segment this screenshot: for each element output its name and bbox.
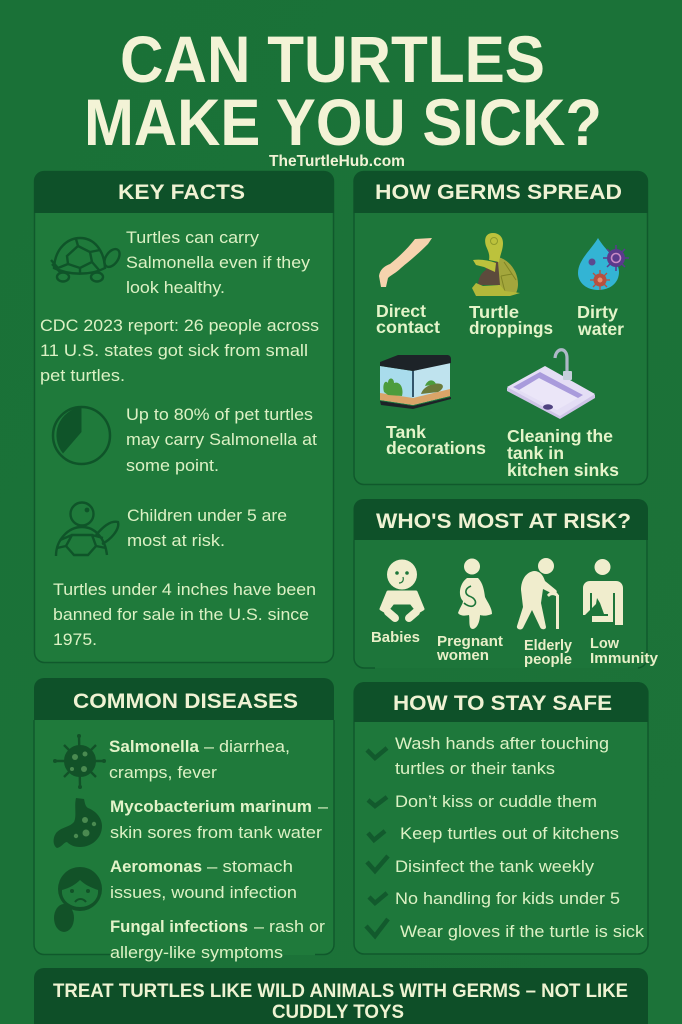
label: pregnant women: women xyxy=(436,648,489,664)
text: sale ban: Turtles under 4 inches have been xyxy=(53,580,316,599)
icon: kitchen sink xyxy=(507,350,595,419)
icon: pie chart xyxy=(53,407,110,464)
label: pregnant women: Pregnant xyxy=(437,634,503,650)
panel: who's most at risk xyxy=(354,499,658,668)
icon: turtle droppings xyxy=(472,233,520,296)
text: mycobacterium: skin sores from tank water xyxy=(110,823,322,842)
text: safety tips: turtles or their tanks xyxy=(395,759,555,778)
label: direct contact: contact xyxy=(376,317,440,337)
icon: stomach xyxy=(54,798,102,848)
label: low immunity: Immunity xyxy=(590,651,658,667)
text: safety tips xyxy=(395,734,645,941)
text: fungal infections: Fungal infections xyxy=(110,917,248,936)
label: tank decorations xyxy=(386,422,486,458)
label: dirty water: Dirty xyxy=(577,302,618,322)
label: tank decorations: decorations xyxy=(386,438,486,458)
label: elderly people: people xyxy=(524,652,572,668)
heading: key facts: KEY FACTS xyxy=(118,180,245,204)
text: salmonella fact: Turtles can carry xyxy=(126,228,260,247)
text: fungal infections: allergy-like symptoms xyxy=(110,943,283,962)
icon: virus xyxy=(53,734,106,789)
icon: low immunity person xyxy=(583,559,623,625)
title: CAN TURTLES xyxy=(120,22,545,96)
label: direct contact xyxy=(376,301,440,337)
text: salmonella: Salmonella xyxy=(109,737,200,756)
text: fungal infections xyxy=(110,917,325,962)
panel: key facts xyxy=(34,171,334,662)
text: CDC report: 11 U.S. states got sick from small xyxy=(40,341,308,360)
text: salmonella fact xyxy=(126,228,311,297)
text: aeromonas: issues, wound infection xyxy=(110,883,297,902)
text: fungal infections: – rash or xyxy=(254,917,325,936)
heading: how germs spread: HOW GERMS SPREAD xyxy=(375,180,622,204)
text: sale ban: banned for sale in the U.S. since xyxy=(53,605,309,624)
label: turtle droppings: droppings xyxy=(469,318,553,338)
icon: aquarium tank xyxy=(380,355,451,409)
label: babies: Babies xyxy=(371,630,420,646)
icon: check marks xyxy=(366,748,388,936)
label: direct contact: Direct xyxy=(376,301,426,321)
text: sale ban xyxy=(53,580,316,649)
text: 80 percent xyxy=(126,405,317,475)
label: pregnant women xyxy=(436,634,503,664)
text: 80 percent: some point. xyxy=(126,456,219,475)
label: dirty water xyxy=(577,302,624,339)
text: aeromonas: Aeromonas xyxy=(110,857,202,876)
text: safety tips: Don’t kiss or cuddle them xyxy=(395,792,597,811)
label: cleaning the tank in kitchen sinks: kitchen sinks xyxy=(507,460,619,480)
text: children under 5: most at risk. xyxy=(127,531,225,550)
heading: common diseases: COMMON DISEASES xyxy=(73,689,298,713)
banner: closing message xyxy=(34,968,648,1024)
text: 80 percent: Up to 80% of pet turtles xyxy=(126,405,313,424)
label: low immunity xyxy=(590,636,658,667)
title: MAKE YOU SICK? xyxy=(84,85,602,159)
text: safety tips: Wash hands after touching xyxy=(395,734,609,753)
text: CDC report xyxy=(40,316,319,385)
label: turtle droppings: Turtle xyxy=(469,302,519,322)
text: safety tips: Disinfect the tank weekly xyxy=(395,857,595,876)
banner: closing message: TREAT TURTLES LIKE WILD ANIMALS WITH GERMS – NOT LIKE xyxy=(53,981,628,1002)
text: children under 5: Children under 5 are xyxy=(127,506,287,525)
text: children under 5 xyxy=(127,506,287,550)
label: cleaning the tank in kitchen sinks xyxy=(507,426,619,480)
text: 80 percent: may carry Salmonella at xyxy=(126,430,317,449)
text: safety tips: No handling for kids under 5 xyxy=(395,889,620,908)
label: low immunity: Low xyxy=(590,636,620,652)
icon: sick face xyxy=(54,867,102,932)
icon: baby xyxy=(381,560,423,618)
label: elderly people xyxy=(524,638,572,668)
text: aeromonas: – stomach xyxy=(207,857,293,876)
website credit: TheTurtleHub.com xyxy=(269,153,405,170)
title xyxy=(84,22,602,159)
text: mycobacterium: Mycobacterium marinum xyxy=(110,797,312,816)
label: elderly people: Elderly xyxy=(524,638,572,654)
text: CDC report: CDC 2023 report: 26 people across xyxy=(40,316,319,335)
icon: baby turtle outline xyxy=(56,502,118,556)
label: turtle droppings xyxy=(469,302,553,338)
text: salmonella: cramps, fever xyxy=(109,763,217,782)
text: safety tips: Keep turtles out of kitchens xyxy=(400,824,619,843)
panel: common diseases xyxy=(34,678,334,962)
text: safety tips: Wear gloves if the turtle is sick xyxy=(400,922,645,941)
icon: turtle outline xyxy=(51,238,123,282)
text: mycobacterium: – xyxy=(318,797,329,816)
icon: elderly person xyxy=(517,558,559,629)
label: dirty water: water xyxy=(577,319,624,339)
icon: pregnant woman xyxy=(458,558,492,629)
panel: how germs spread xyxy=(354,171,648,484)
text: mycobacterium xyxy=(110,797,329,842)
panel: how to stay safe xyxy=(354,682,648,954)
label: cleaning the tank in kitchen sinks: tank in xyxy=(507,443,564,463)
heading: who's most at risk: WHO'S MOST AT RISK? xyxy=(376,509,631,533)
text: salmonella fact: look healthy. xyxy=(126,278,225,297)
banner: closing message: CUDDLY TOYS xyxy=(272,1002,404,1023)
text: salmonella: – diarrhea, xyxy=(204,737,290,756)
label: tank decorations: Tank xyxy=(386,422,426,442)
text: salmonella fact: Salmonella even if they xyxy=(126,253,311,272)
heading: how to stay safe: HOW TO STAY SAFE xyxy=(393,691,612,715)
label: cleaning the tank in kitchen sinks: Cleaning the xyxy=(507,426,613,446)
text: CDC report: pet turtles. xyxy=(40,366,125,385)
icon: arm xyxy=(379,238,432,287)
text: sale ban: 1975. xyxy=(53,630,97,649)
icon: dirty water drop xyxy=(578,238,629,290)
text: aeromonas xyxy=(110,857,297,902)
text: salmonella xyxy=(109,737,290,782)
